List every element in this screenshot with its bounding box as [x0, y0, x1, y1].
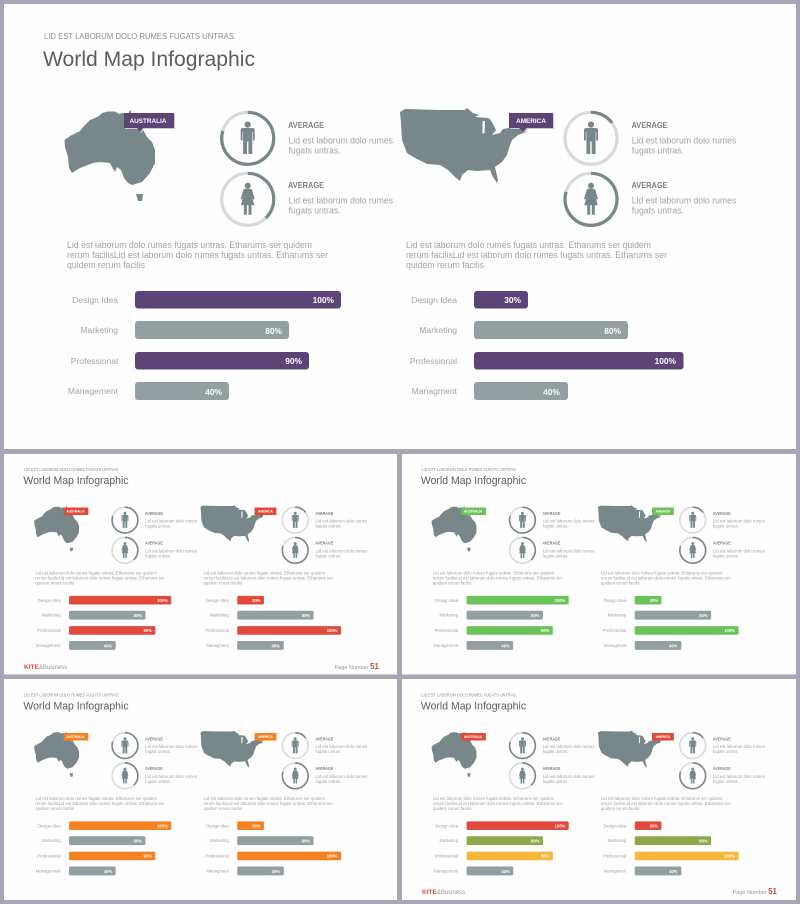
multicolour slide content: AVERAGE [542, 736, 561, 741]
red slide content: quidem rerum facilis [35, 580, 75, 586]
orange slide content: 90% [144, 854, 152, 859]
bar chart: America: 100% [655, 356, 677, 366]
green slide content: Marketing [608, 613, 627, 618]
text: female average America: AVERAGE [632, 180, 668, 190]
orange slide content: rerum facilisLid est laborum dolo rumes fugats untras. Etharums ser [35, 801, 165, 807]
icon: female ring America [565, 173, 617, 225]
red slide content: Lid est laborum dolo rumes fugats untras. Etharums ser quidem [35, 571, 157, 577]
green slide content: 100% [724, 628, 735, 633]
red slide content: LID EST LABORUM DOLO RUMES FUGATS UNTRAS. [24, 467, 119, 472]
footer: page number: Page Number 51 [335, 662, 380, 671]
text: male average America [632, 120, 736, 156]
red slide content: Design Idea [206, 598, 229, 603]
subtitle: LID EST LABORUM DOLO RUMES FUGATS UNTRAS. [44, 31, 236, 41]
orange slide content: 100% [157, 823, 168, 828]
orange slide content: fugats untras. [315, 749, 341, 755]
text: male average Australia: fugats untras. [288, 146, 340, 156]
green slide content: AVERAGE [542, 541, 561, 546]
text: female average America: fugats untras. [632, 206, 684, 216]
orange slide content [23, 692, 368, 875]
callout: Australia [124, 113, 175, 133]
red slide content: Lid est laborum dolo rumes [145, 548, 198, 554]
red slide content: AUSTRALIA [66, 510, 85, 514]
text: female average Australia: Lid est laborum dolo rumes [288, 196, 393, 206]
red slide content: Managment [206, 643, 230, 648]
text block: Australia paragraph [67, 240, 329, 271]
red slide content: Design Idea [38, 598, 61, 603]
red slide content: 100% [327, 628, 338, 633]
multicolour slide content: Design Idea [435, 823, 459, 828]
text: male average America: Lid est laborum dolo rumes [632, 136, 736, 146]
callout: Australia: AUSTRALIA [130, 118, 167, 125]
red slide content: AMERICA [258, 510, 274, 514]
orange slide content: rerum facilisLid est laborum dolo rumes fugats untras. Etharums ser [203, 801, 333, 807]
orange slide content: 80% [302, 839, 310, 844]
orange slide content: Lid est laborum dolo rumes fugats untras. Etharums ser quidem [35, 796, 157, 802]
multicolour slide content: Management [433, 868, 459, 873]
multicolour slide content: fugats untras. [543, 779, 568, 785]
bar chart: America [410, 291, 684, 400]
green slide content: Professional [435, 628, 458, 633]
text: male average America: fugats untras. [632, 146, 684, 156]
icon: male ring America [565, 112, 617, 164]
green slide content: Lid est laborum dolo rumes [713, 548, 765, 554]
orange slide content: Professional [37, 854, 61, 859]
multicolour slide content: 90% [541, 854, 550, 859]
green slide content: 30% [650, 598, 658, 603]
text block: Australia paragraph: rerum facilisLid est laborum dolo rumes fugats untras. Etharums ser [67, 250, 329, 261]
text block: Australia paragraph: Lid est laborum dolo rumes fugats untras. Etharums ser quidem [67, 240, 312, 251]
red slide content: Professional [37, 628, 61, 633]
panel: main slide purple [4, 4, 796, 449]
panel: orange slide [4, 679, 397, 900]
text: male average America: AVERAGE [632, 120, 668, 130]
orange slide content: fugats untras. [315, 779, 341, 785]
footer: brand: KITE&Business [24, 664, 67, 671]
map: Australia [64, 110, 155, 201]
green slide content: fugats untras. [543, 524, 568, 530]
orange slide content: AUSTRALIA [66, 735, 85, 739]
green slide content: Lid est laborum dolo rumes fugats untras. Etharums ser quidem [601, 571, 723, 577]
green slide content: fugats untras. [543, 553, 568, 559]
green slide content: Lid est laborum dolo rumes [713, 519, 765, 525]
green slide content: Design Idea [604, 598, 627, 603]
multicolour slide content: quidem rerum facilis [433, 806, 472, 812]
multicolour slide content: World Map Infographic [421, 701, 527, 713]
orange slide content: 40% [272, 869, 280, 874]
red slide content: 40% [272, 643, 280, 648]
green slide content: AVERAGE [542, 511, 561, 516]
multicolour slide content: 30% [650, 823, 658, 828]
bar chart: Australia [68, 291, 341, 400]
multicolour slide content [421, 692, 765, 875]
red slide content: 80% [302, 613, 310, 618]
green slide content: Managment [604, 643, 627, 648]
multicolour slide content: quidem rerum facilis [601, 806, 640, 812]
green slide content: LID EST LABORUM DOLO RUMES FUGATS UNTRAS. [421, 467, 517, 472]
green slide content: AVERAGE [713, 511, 731, 516]
multicolour slide content: Marketing [608, 838, 627, 843]
red slide content: 90% [144, 628, 152, 633]
multicolour slide content: fugats untras. [713, 749, 739, 755]
multicolour slide content: AVERAGE [542, 766, 561, 771]
panel: green slide [402, 454, 796, 674]
green slide content: AMERICA [656, 510, 671, 514]
red slide content: fugats untras. [145, 524, 171, 530]
orange slide content: 80% [134, 839, 142, 844]
text: male average Australia: Lid est laborum dolo rumes [288, 136, 393, 146]
red slide content: fugats untras. [315, 524, 341, 530]
multicolour slide content: rerum facilisLid est laborum dolo rumes fugats untras. Etharums ser [601, 801, 731, 807]
orange slide content: Lid est laborum dolo rumes [145, 744, 198, 750]
orange slide content: AVERAGE [145, 766, 163, 771]
orange slide content: AVERAGE [315, 766, 333, 771]
green slide content: Marketing [439, 613, 459, 618]
green slide content: rerum facilisLid est laborum dolo rumes fugats untras. Etharums ser [601, 575, 731, 581]
multicolour slide content: AUSTRALIA [464, 735, 483, 739]
orange slide content: Managment [206, 868, 230, 873]
green slide content: fugats untras. [713, 553, 739, 559]
red slide content: Professional [205, 628, 229, 633]
orange slide content: 30% [252, 823, 261, 828]
text: female average America: Lid est laborum dolo rumes [632, 196, 736, 206]
orange slide content: AVERAGE [145, 736, 163, 741]
map: America [400, 108, 527, 183]
bar chart: America: Managment [412, 386, 458, 396]
bar chart: Australia: Design Idea [72, 295, 118, 305]
green slide content: quidem rerum facilis [433, 580, 472, 586]
red slide content: Marketing [42, 613, 61, 618]
orange slide content: Marketing [42, 838, 61, 843]
green slide content: quidem rerum facilis [601, 580, 640, 586]
red slide content: 100% [157, 598, 168, 603]
red slide content: Lid est laborum dolo rumes fugats untras. Etharums ser quidem [203, 571, 325, 577]
red slide content: 40% [104, 643, 113, 648]
multicolour slide content: Design Idea [604, 823, 627, 828]
bar chart: Australia: Professional [71, 356, 118, 366]
red slide content: Lid est laborum dolo rumes [315, 548, 368, 554]
red slide content: Marketing [210, 613, 229, 618]
red slide content: fugats untras. [315, 553, 341, 559]
bar chart: Australia: Marketing [80, 325, 118, 335]
red slide content: Lid est laborum dolo rumes [145, 519, 198, 525]
bar chart: Australia: 80% [265, 326, 283, 336]
green slide content: 40% [669, 643, 678, 648]
red slide content: rerum facilisLid est laborum dolo rumes fugats untras. Etharums ser [35, 575, 165, 581]
green slide content: 40% [501, 643, 510, 648]
orange slide content: Design Idea [206, 823, 229, 828]
red slide content: fugats untras. [145, 553, 171, 559]
orange slide content: quidem rerum facilis [203, 806, 243, 812]
green slide content: AVERAGE [713, 541, 731, 546]
text: female average Australia: fugats untras. [288, 206, 340, 216]
multicolour slide content: Lid est laborum dolo rumes [543, 774, 595, 780]
multicolour slide content: fugats untras. [713, 779, 739, 785]
green slide content: Professional [603, 628, 626, 633]
red slide content: quidem rerum facilis [203, 580, 243, 586]
text: male average Australia: AVERAGE [288, 120, 324, 130]
green slide content: 80% [531, 613, 540, 618]
text: female average Australia [288, 180, 393, 216]
multicolour slide content: Lid est laborum dolo rumes [713, 744, 765, 750]
green slide content: 80% [699, 613, 708, 618]
green slide content: 90% [541, 628, 550, 633]
bar chart: Australia: 100% [313, 295, 335, 305]
bar chart: Australia: 90% [285, 356, 303, 366]
green slide content: Lid est laborum dolo rumes [543, 548, 595, 554]
multicolour slide content: fugats untras. [543, 749, 568, 755]
green slide content [421, 467, 765, 650]
green slide content: rerum facilisLid est laborum dolo rumes fugats untras. Etharums ser [433, 575, 563, 581]
text block: America paragraph: rerum facilisLid est laborum dolo rumes fugats untras. Etharums ser [406, 250, 668, 261]
multicolour slide content: Professional [435, 854, 458, 859]
multicolour slide content: LID EST LABORUM DOLO RUMES FUGATS UNTRAS. [421, 692, 517, 697]
multicolour slide content: AVERAGE [713, 766, 731, 771]
multicolour slide content: Marketing [439, 838, 459, 843]
orange slide content: Professional [205, 854, 229, 859]
multicolour slide content: AMERICA [656, 735, 671, 739]
red slide content: AVERAGE [315, 541, 333, 546]
red slide content: AVERAGE [145, 541, 163, 546]
multicolour slide content: 40% [669, 869, 678, 874]
red slide content: 30% [252, 598, 261, 603]
orange slide content: Lid est laborum dolo rumes fugats untras. Etharums ser quidem [203, 796, 325, 802]
green slide content: Lid est laborum dolo rumes fugats untras. Etharums ser quidem [433, 571, 554, 577]
text block: America paragraph: quidem rerum facilis [406, 260, 484, 271]
orange slide content: Lid est laborum dolo rumes [315, 744, 368, 750]
multicolour slide content: Professional [603, 854, 626, 859]
multicolour slide content: 100% [555, 823, 566, 828]
multicolour slide content: 80% [531, 839, 540, 844]
multicolour slide content: 80% [699, 839, 708, 844]
green slide content: fugats untras. [713, 524, 739, 530]
orange slide content: 40% [104, 869, 113, 874]
bar chart: America: 30% [504, 295, 522, 305]
red slide content [23, 467, 368, 650]
panel: red slide [4, 454, 397, 674]
bar chart: Australia: Management [68, 386, 119, 396]
multicolour slide content: Lid est laborum dolo rumes fugats untras. Etharums ser quidem [433, 796, 554, 802]
red slide content: Lid est laborum dolo rumes [315, 519, 368, 525]
orange slide content: Marketing [210, 838, 229, 843]
orange slide content: LID EST LABORUM DOLO RUMES FUGATS UNTRAS. [24, 692, 119, 697]
orange slide content: fugats untras. [145, 779, 171, 785]
text block: America paragraph [406, 240, 668, 271]
red slide content: Management [36, 643, 61, 648]
multicolour slide content: 40% [501, 869, 510, 874]
icon: male ring Australia [222, 112, 274, 164]
orange slide content: Lid est laborum dolo rumes [315, 774, 368, 780]
icon: female ring Australia [222, 173, 274, 225]
text: male average Australia [288, 120, 393, 156]
green slide content: 100% [555, 598, 566, 603]
orange slide content: 100% [327, 854, 338, 859]
orange slide content: AMERICA [258, 735, 274, 739]
red slide content: rerum facilisLid est laborum dolo rumes fugats untras. Etharums ser [203, 575, 333, 581]
red slide content: AVERAGE [315, 511, 333, 516]
green slide content: Management [433, 643, 459, 648]
callout: America [509, 113, 554, 133]
orange slide content: Management [36, 868, 61, 873]
multicolour slide content: 100% [724, 854, 735, 859]
text block: Australia paragraph: quidem rerum facilis [67, 260, 145, 271]
multicolour slide content: AVERAGE [713, 736, 731, 741]
multicolour slide content: Lid est laborum dolo rumes fugats untras. Etharums ser quidem [601, 796, 723, 802]
title: World Map Infographic [43, 47, 255, 71]
red slide content: AVERAGE [145, 511, 163, 516]
green slide content: Design Idea [435, 598, 459, 603]
orange slide content: Lid est laborum dolo rumes [145, 774, 198, 780]
multicolour slide content: Managment [604, 868, 627, 873]
orange slide content: Design Idea [38, 823, 61, 828]
green slide content: AUSTRALIA [464, 510, 483, 514]
bar chart: America: Professional [410, 356, 457, 366]
bar chart: Australia: 40% [205, 387, 223, 397]
footer: page number: Page Number 51 [733, 887, 778, 896]
callout: America: AMERICA [516, 118, 546, 125]
bar chart: America: Marketing [419, 325, 457, 335]
panel: multicolour slide [402, 679, 796, 900]
bar chart: America: Design Idea [411, 295, 457, 305]
orange slide content: World Map Infographic [23, 701, 129, 713]
green slide content: Lid est laborum dolo rumes [543, 519, 595, 525]
red slide content: 80% [134, 613, 142, 618]
orange slide content: quidem rerum facilis [35, 806, 75, 812]
orange slide content: fugats untras. [145, 749, 171, 755]
multicolour slide content: rerum facilisLid est laborum dolo rumes fugats untras. Etharums ser [433, 801, 563, 807]
text: female average America [632, 180, 736, 216]
multicolour slide content: Lid est laborum dolo rumes [713, 774, 765, 780]
green slide content: World Map Infographic [421, 475, 527, 487]
bar chart: America: 40% [543, 387, 561, 397]
orange slide content: AVERAGE [315, 736, 333, 741]
bar chart: America: 80% [604, 326, 622, 336]
footer: brand: KITE&Business [422, 889, 465, 896]
red slide content: World Map Infographic [23, 475, 129, 487]
text block: America paragraph: Lid est laborum dolo rumes fugats untras. Etharums ser quidem [406, 240, 651, 251]
text: female average Australia: AVERAGE [288, 180, 324, 190]
multicolour slide content: Lid est laborum dolo rumes [543, 744, 595, 750]
